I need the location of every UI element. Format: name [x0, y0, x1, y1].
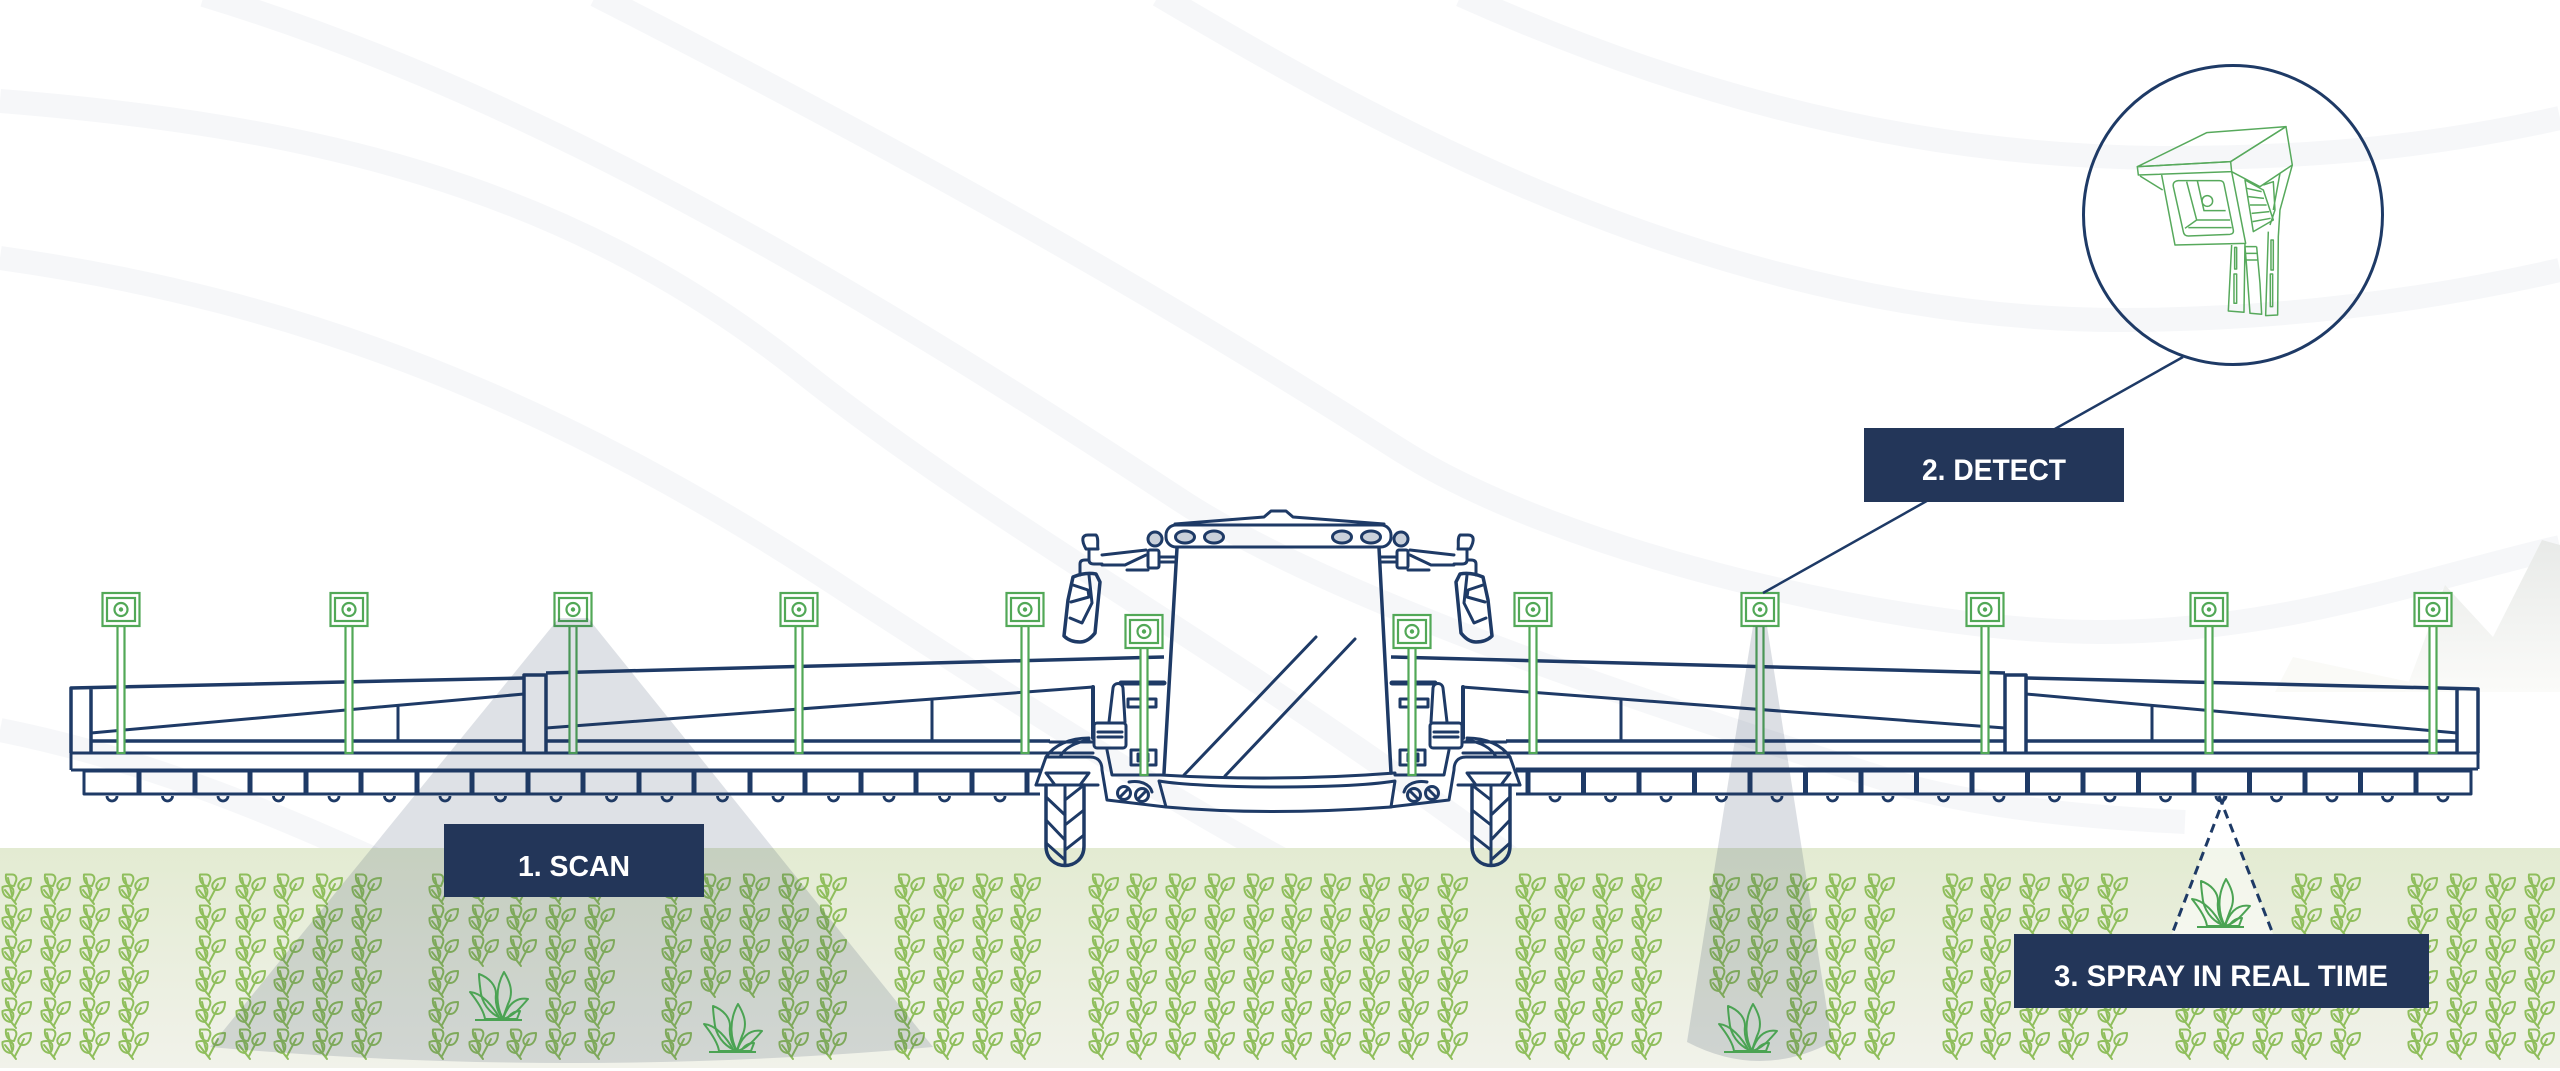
weed icon: detected: [1719, 1004, 1777, 1052]
label: 1. SCAN: 1. SCAN: [518, 851, 630, 883]
left boom frame: [71, 657, 1164, 770]
leader line from sensor to zoom circle: [1763, 357, 2183, 593]
label: 3. SPRAY IN REAL TIME: 3. SPRAY IN REAL TIME: [2054, 960, 2388, 993]
label: 2. DETECT: 2. DETECT: [1922, 454, 2066, 487]
label: 1. SCAN: [444, 824, 704, 897]
zoomed camera circle: [2084, 66, 2382, 364]
left spray modules: [84, 771, 1040, 801]
distant mountains: [2275, 540, 2560, 692]
tractor front view: [1036, 511, 1520, 866]
weed icon: scan area left: [470, 972, 528, 1020]
right boom frame: [1391, 657, 2478, 769]
left side of tractor: mirror, body, wheel: [1036, 532, 1175, 866]
windshield with wiper lines: [1164, 548, 1391, 776]
weed icon: sprayed: [2192, 879, 2250, 927]
right spray modules: [1516, 771, 2471, 801]
weed icon: scan area right: [704, 1004, 762, 1052]
right side of tractor: mirror, body, wheel: [1381, 532, 1520, 866]
spray cone with dashed edges: [2172, 796, 2273, 934]
camera sensors on poles: [102, 593, 2452, 775]
front bumper: [1159, 773, 1395, 812]
icon: camera sensor: [2137, 127, 2292, 316]
detect cone of vision: [1687, 626, 1832, 1061]
scan cone of vision: [210, 618, 933, 1063]
crop rows: [2, 874, 2554, 1059]
label: 3. SPRAY IN REAL TIME: [2014, 934, 2429, 1008]
label: 2. DETECT: [1864, 428, 2124, 502]
sprayer boom: [71, 657, 2478, 801]
cab roof and light bar: [1166, 511, 1391, 547]
ground strip: [0, 848, 2560, 1068]
